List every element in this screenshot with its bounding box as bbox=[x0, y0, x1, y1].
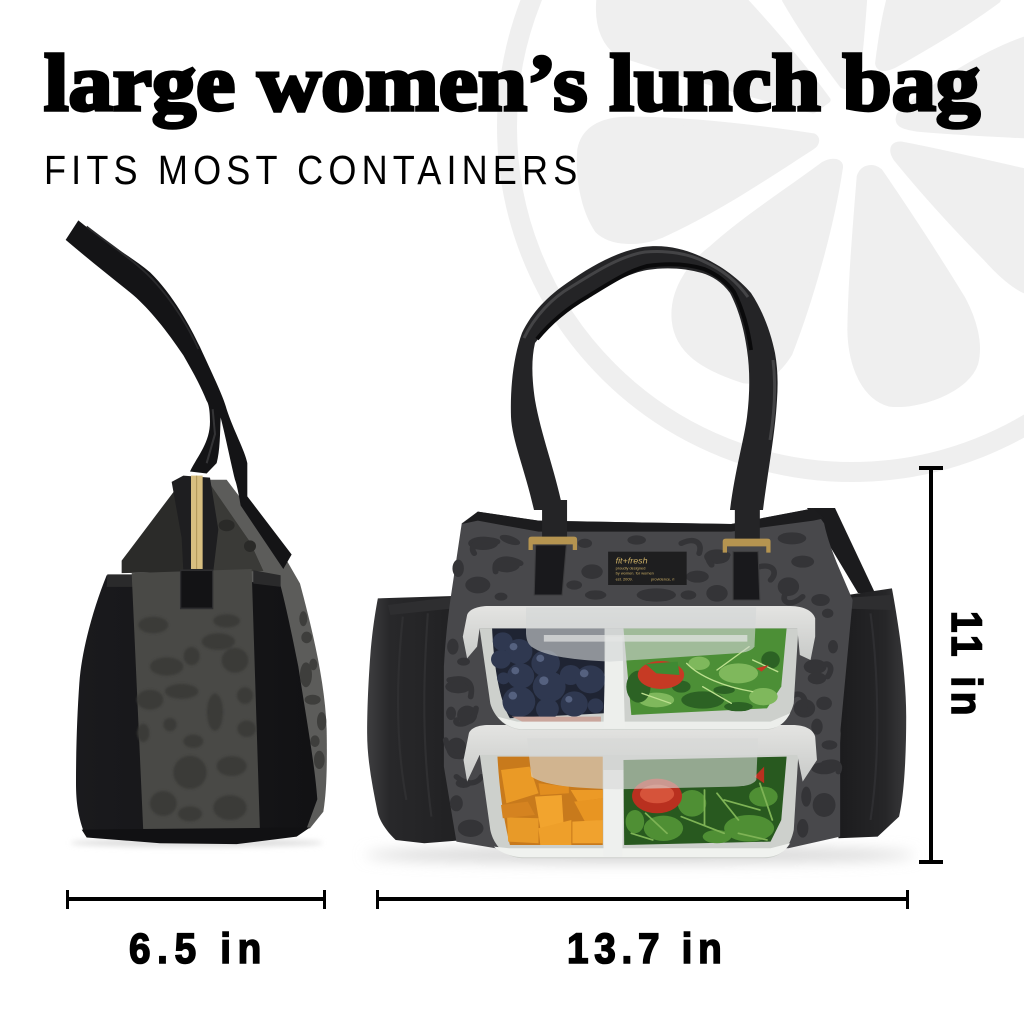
front view of lunch bag with containers bbox=[365, 246, 915, 863]
right side pocket bbox=[837, 588, 906, 838]
brand label: est. 2009. bbox=[616, 578, 633, 582]
lower glass bottom bbox=[494, 843, 790, 857]
side pocket mesh bbox=[76, 575, 317, 830]
left side pocket bbox=[367, 596, 457, 843]
subtitle: FITS MOST CONTAINERS bbox=[44, 148, 577, 194]
rear shoulder strap bbox=[807, 508, 875, 593]
upper glass bottom bbox=[497, 713, 790, 729]
depth label: 6.5 in bbox=[129, 924, 261, 972]
upper glass container with blueberries and salad bbox=[463, 606, 815, 730]
width dimension line bbox=[376, 890, 909, 909]
top binding bbox=[462, 508, 824, 532]
upper lid bbox=[463, 606, 815, 660]
left handle tab and buckle bbox=[529, 500, 577, 595]
side gusset panel bbox=[132, 569, 260, 832]
brand label: by women. for women bbox=[616, 572, 654, 576]
salad bbox=[623, 628, 787, 715]
brand label bbox=[608, 552, 687, 585]
front handles bbox=[511, 246, 778, 510]
leopard print bbox=[445, 532, 839, 838]
lower glass container with cheese and salad bbox=[464, 725, 817, 858]
side zipper bbox=[172, 476, 218, 571]
height dimension line bbox=[919, 466, 943, 864]
brand label: proudly designed bbox=[616, 566, 645, 570]
citrus slice watermark bbox=[507, 0, 1024, 472]
cheese cubes bbox=[497, 757, 603, 845]
side strap bbox=[66, 220, 292, 569]
brand label: fit+fresh bbox=[616, 556, 648, 566]
side handle tab bbox=[181, 570, 213, 608]
bag body bbox=[444, 508, 853, 848]
blueberries bbox=[491, 628, 605, 723]
right handle tab and buckle bbox=[723, 500, 771, 600]
lower lid bbox=[464, 725, 817, 782]
salad bbox=[623, 757, 787, 845]
side view of lunch bag bbox=[66, 220, 327, 847]
side base bbox=[82, 828, 310, 844]
depth dimension line bbox=[66, 890, 326, 909]
brand label: providence, ri bbox=[651, 578, 675, 582]
title: large women’s lunch bag bbox=[44, 40, 980, 128]
width label: 13.7 in bbox=[567, 924, 722, 972]
height label: 11 in bbox=[943, 611, 991, 715]
